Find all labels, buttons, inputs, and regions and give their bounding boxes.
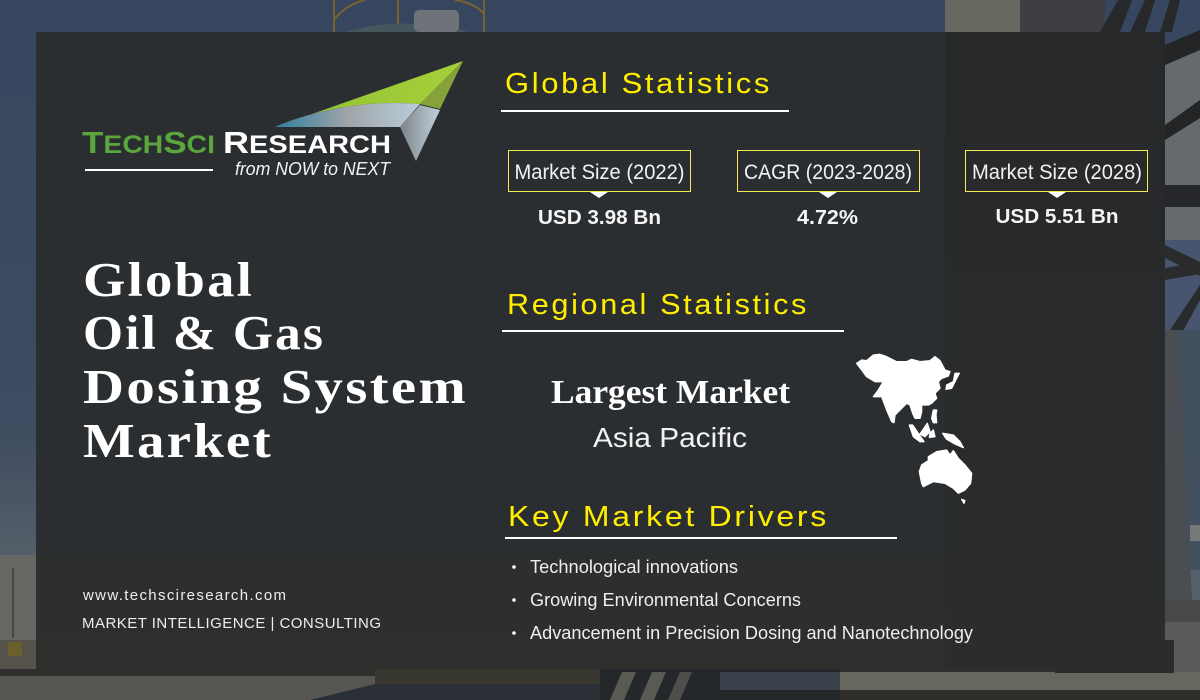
stat: market size 2022: USD 3.98 Bn (538, 207, 661, 229)
main title: Global (83, 252, 254, 307)
section: regional statistics (502, 289, 972, 503)
icon: logo arrow (275, 61, 463, 161)
logo tagline: from NOW to NEXT (235, 159, 392, 179)
section: global statistics (501, 68, 1148, 229)
main title (83, 252, 468, 468)
text: Asia Pacific: Asia Pacific (593, 422, 747, 453)
website and tagline footer (82, 587, 381, 632)
bullet list of drivers (512, 557, 973, 643)
main title: Oil & Gas (83, 305, 325, 360)
text: largest market: Largest Market (551, 374, 791, 411)
stat: market size 2028 (966, 150, 1148, 228)
website and tagline footer: www.techsciresearch.com (82, 587, 286, 604)
heading: regional statistics: Regional Statistics (507, 289, 809, 321)
stat: CAGR (738, 150, 920, 229)
bullet list of drivers: Technological innovations (530, 557, 738, 577)
icon: Asia Pacific map (857, 354, 972, 503)
main title: Market (83, 413, 273, 468)
stat: CAGR: CAGR (2023-2028) (744, 161, 912, 184)
stat: CAGR: 4.72% (797, 207, 858, 229)
section: key market drivers (505, 501, 973, 643)
logo wordmark: TechSci: TECHSCI (82, 125, 215, 160)
stat: market size 2022 (508, 150, 690, 229)
stat: market size 2028: Market Size (2028) (972, 161, 1142, 184)
website and tagline footer: MARKET INTELLIGENCE | CONSULTING (82, 615, 381, 632)
logo: TechSci Research (82, 61, 463, 179)
bullet list of drivers: Growing Environmental Concerns (530, 590, 801, 610)
bullet list of drivers: Advancement in Precision Dosing and Nanotechnology (530, 623, 973, 643)
stat: market size 2028: USD 5.51 Bn (996, 206, 1118, 228)
heading: key market drivers: Key Market Drivers (508, 501, 829, 533)
main title: Dosing System (83, 359, 468, 414)
stat: market size 2022: Market Size (2022) (514, 161, 684, 184)
heading: global statistics: Global Statistics (505, 68, 772, 100)
logo wordmark: Research: RESEARCH (223, 125, 391, 160)
